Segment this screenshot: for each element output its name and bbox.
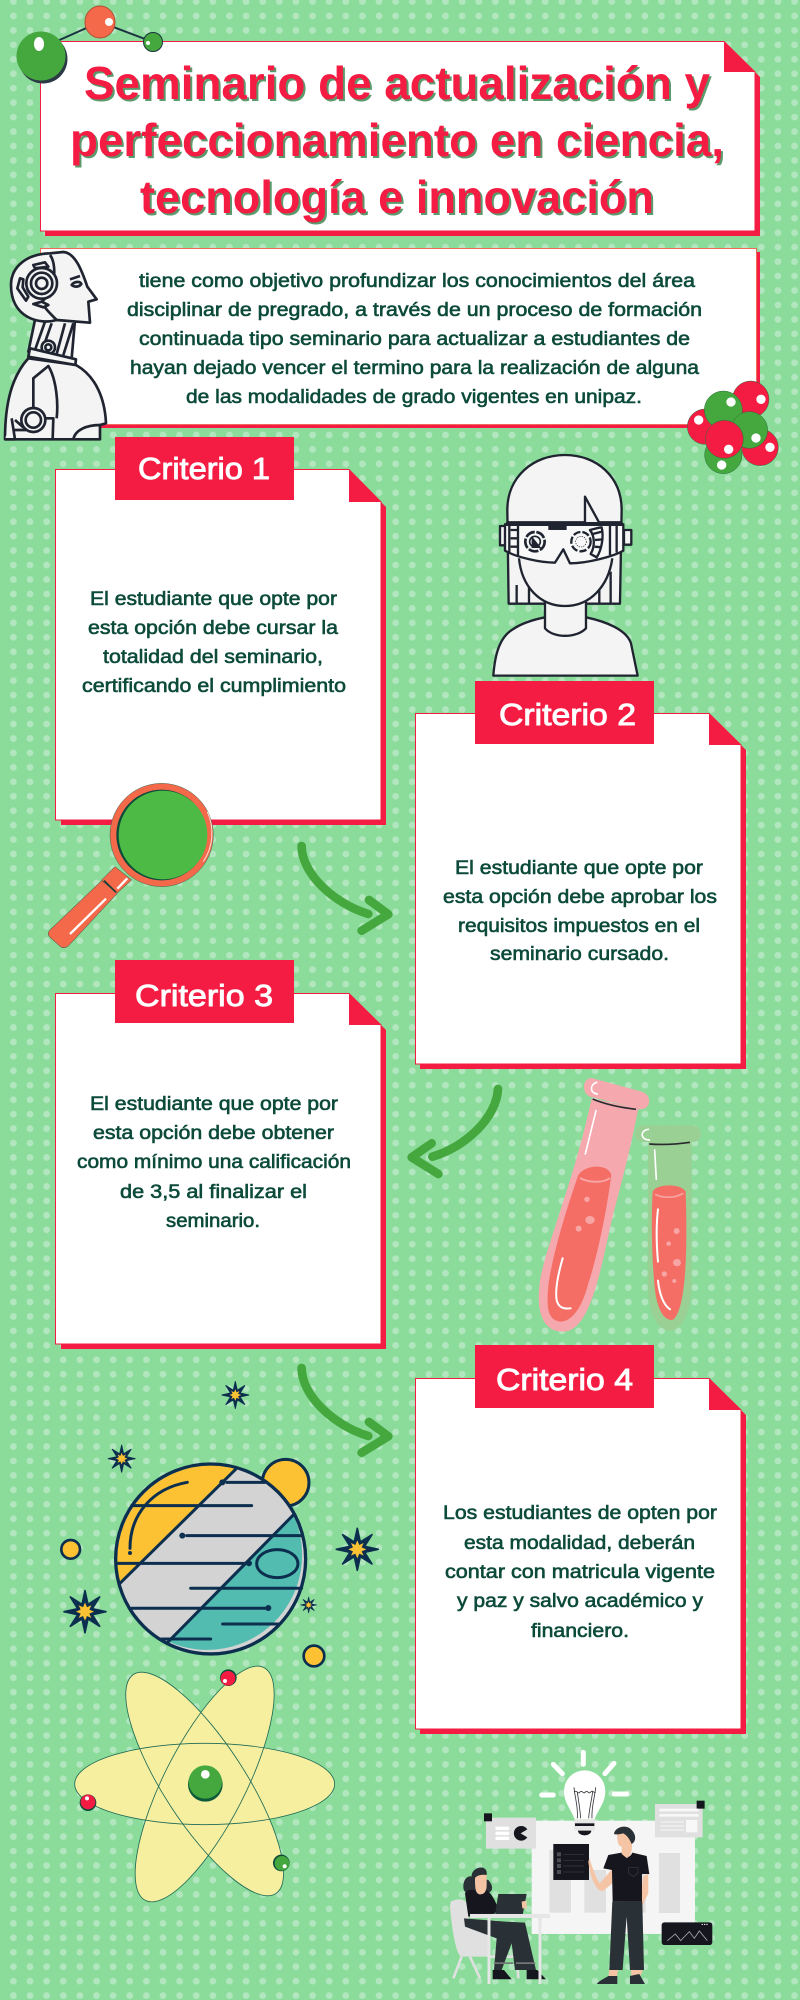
panel: criterio 4 bbox=[416, 1345, 746, 1734]
tab: criterio 1 bbox=[115, 437, 294, 500]
intro text: tiene como objetivo profundizar los conocimientos del área bbox=[139, 270, 695, 292]
icon: molecule cluster bbox=[687, 381, 778, 474]
text: criterio 4 bbox=[443, 1502, 718, 1642]
panel: criterio 2 bbox=[416, 681, 746, 1069]
text: criterio 2 bbox=[443, 857, 717, 965]
intro text: de las modalidades de grado vigentes en unipaz. bbox=[186, 386, 642, 408]
text: criterio 2: seminario cursado. bbox=[490, 943, 669, 965]
text: criterio 2: El estudiante que opte por bbox=[455, 857, 704, 879]
text: criterio 2: esta opción debe aprobar los bbox=[443, 886, 717, 908]
icon: atom bbox=[75, 1649, 335, 1919]
tab: criterio 4: Criterio 4 bbox=[496, 1362, 633, 1397]
intro text bbox=[127, 270, 702, 408]
title: Seminario de actualización y bbox=[84, 57, 710, 109]
text: criterio 4: y paz y salvo académico y bbox=[457, 1590, 703, 1612]
tab: criterio 3 bbox=[115, 960, 294, 1023]
panel: title bbox=[40, 41, 760, 236]
icon: person with goggles bbox=[493, 455, 638, 676]
tab: criterio 4 bbox=[475, 1345, 654, 1408]
icon: test tubes bbox=[539, 1078, 701, 1332]
text: criterio 3: El estudiante que opte por bbox=[90, 1093, 339, 1115]
arrow: criterio 1 to 2 bbox=[302, 846, 388, 931]
panel: criterio 3 bbox=[56, 960, 386, 1349]
woman at table bbox=[450, 1868, 550, 1984]
text: criterio 3: esta opción debe obtener bbox=[93, 1122, 335, 1144]
chart cards bbox=[484, 1801, 712, 1945]
text: criterio 3: como mínimo una calificación bbox=[77, 1151, 351, 1173]
text: criterio 4: financiero. bbox=[531, 1620, 629, 1642]
title: tecnología e innovación bbox=[140, 171, 654, 223]
green tube bbox=[635, 1125, 701, 1331]
light bulb bbox=[542, 1752, 627, 1835]
text: criterio 1: totalidad del seminario, bbox=[103, 646, 323, 668]
arrow: criterio 2 to 3 bbox=[412, 1089, 498, 1174]
tab: criterio 2 bbox=[475, 681, 654, 744]
title bbox=[70, 57, 724, 223]
text: criterio 2: requisitos impuestos en el bbox=[458, 915, 700, 937]
tab: criterio 3: Criterio 3 bbox=[135, 978, 273, 1013]
text: criterio 4: contar con matricula vigente bbox=[445, 1561, 715, 1583]
icon: robot bbox=[5, 252, 106, 439]
board bbox=[532, 1821, 695, 1934]
title: perfeccionamiento en ciencia, bbox=[70, 114, 724, 166]
text: criterio 3: seminario. bbox=[166, 1210, 260, 1232]
icon: planet with stars bbox=[61, 1382, 378, 1666]
icon: molecule top-left bbox=[16, 6, 162, 84]
intro text: disciplinar de pregrado, a través de un proceso de formación bbox=[127, 299, 702, 321]
text: criterio 4: esta modalidad, deberán bbox=[464, 1532, 695, 1554]
illustration: people with idea board bbox=[450, 1752, 712, 1984]
text: criterio 1: El estudiante que opte por bbox=[90, 588, 338, 610]
text: criterio 3: de 3,5 al finalizar el bbox=[120, 1181, 307, 1203]
tab: criterio 2: Criterio 2 bbox=[499, 697, 636, 732]
text: criterio 1: certificando el cumplimiento bbox=[82, 675, 346, 697]
pink tube bbox=[539, 1078, 649, 1332]
tab: criterio 1: Criterio 1 bbox=[138, 451, 270, 486]
man bbox=[588, 1827, 649, 1984]
intro text: hayan dejado vencer el termino para la realización de alguna bbox=[130, 357, 699, 379]
arrow: criterio 3 to 4 bbox=[302, 1368, 388, 1453]
intro text: continuada tipo seminario para actualizar a estudiantes de bbox=[139, 328, 690, 350]
panel: introduction bbox=[40, 248, 760, 428]
icon: magnifying glass bbox=[48, 783, 213, 948]
panel: criterio 1 bbox=[56, 437, 386, 825]
text: criterio 4: Los estudiantes de opten por bbox=[443, 1502, 718, 1524]
text: criterio 3 bbox=[77, 1093, 351, 1232]
text: criterio 1: esta opción debe cursar la bbox=[88, 617, 338, 639]
text: criterio 1 bbox=[82, 588, 346, 697]
